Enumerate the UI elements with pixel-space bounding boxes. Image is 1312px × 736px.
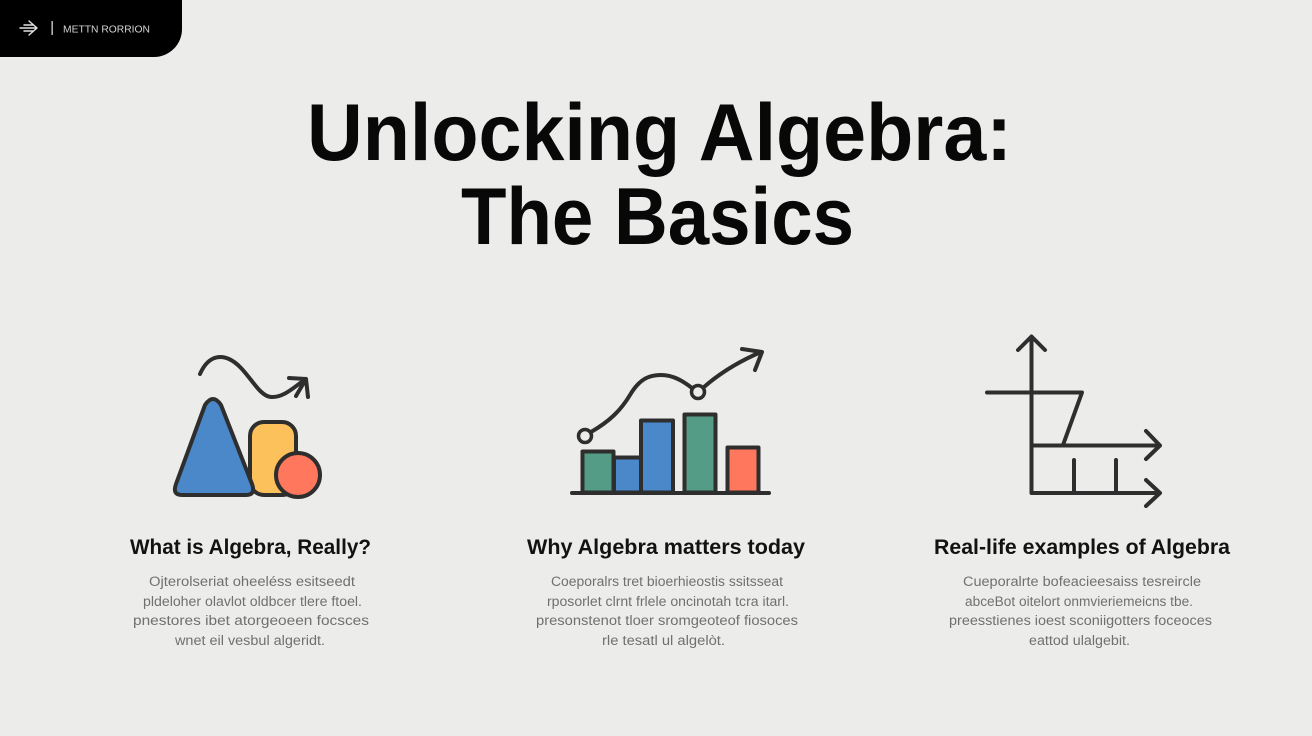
body text: presonstenot tloer sromgeoteof fiosoces: [536, 613, 798, 628]
title: Unlocking Algebra:: [307, 88, 1012, 178]
body text: [536, 574, 798, 648]
heading: What is Algebra, Really?: [130, 536, 371, 559]
body text: preesstienes ioest sconiigotters foceoces: [949, 613, 1212, 628]
panel: real-life examples: [934, 336, 1230, 648]
panel: why algebra matters: [527, 349, 805, 648]
body text: Ojterolseriat oheeléss esitseedt: [149, 574, 355, 589]
panel: what is algebra: [130, 357, 371, 648]
body text: [949, 574, 1212, 648]
icon: geometric shapes with curved arrow: [175, 357, 320, 497]
icon: bar chart with rising trend arrow: [572, 349, 769, 493]
body text: abceBot oitelort onmvieriemeicns tbe.: [965, 594, 1193, 609]
body text: pnestores ibet atorgeoeen focsces: [133, 613, 369, 628]
body text: rle tesatl ul algelòt.: [602, 633, 725, 648]
body text: wnet eil vesbul algeridt.: [174, 633, 325, 648]
body text: [133, 574, 369, 648]
icon: axes with arrows: [987, 336, 1160, 506]
title: [307, 88, 1012, 262]
icon: badge arrow: [20, 21, 37, 35]
heading: Real-life examples of Algebra: [934, 536, 1230, 559]
title: The Basics: [461, 172, 854, 262]
top-left badge: [0, 0, 182, 57]
body text: pldeloher olavlot oldbcer tlere ftoel.: [143, 594, 362, 609]
badge label: METTN RORRION: [63, 24, 150, 36]
body text: Cueporalrte bofeacieesaiss tesreircle: [963, 574, 1201, 589]
body text: Coeporalrs tret bioerhieostis ssitsseat: [551, 574, 783, 589]
heading: Why Algebra matters today: [527, 536, 805, 559]
body text: eattod ulalgebit.: [1029, 633, 1130, 648]
body text: rposorlet clrnt frlele oncinotah tcra itarl.: [547, 594, 789, 609]
